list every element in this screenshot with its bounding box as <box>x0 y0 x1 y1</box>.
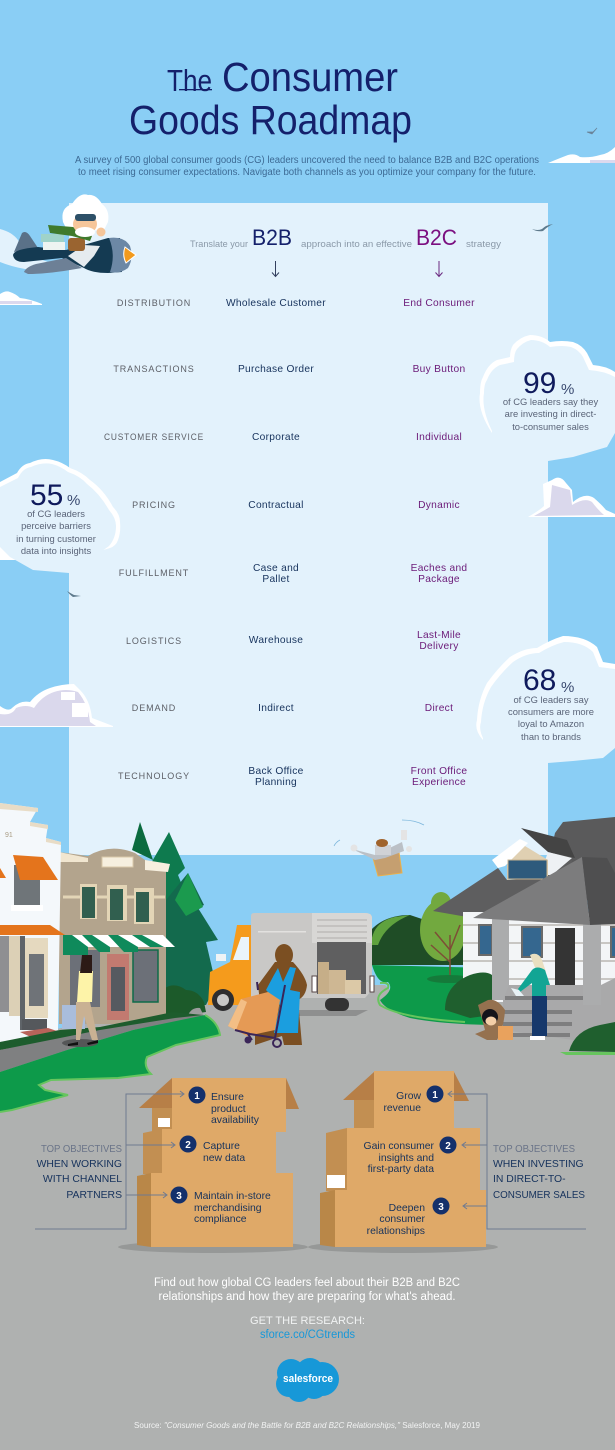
right objectives heading: TOP OBJECTIVES <box>493 1144 575 1155</box>
row: distribution <box>117 298 475 309</box>
objective 3: Deepen <box>389 1203 425 1214</box>
cloud callout: 68 percent: consumers are more <box>508 706 594 717</box>
row: technology: Front Office <box>411 766 467 777</box>
cloud with cup <box>528 478 615 517</box>
row: demand: Indirect <box>258 703 294 714</box>
dormer wall <box>540 852 572 875</box>
row: transactions: TRANSACTIONS <box>113 364 195 374</box>
row: distribution: DISTRIBUTION <box>117 298 191 308</box>
row: pricing <box>132 500 460 511</box>
house <box>433 817 615 1055</box>
door <box>107 954 129 1020</box>
bear body <box>255 962 307 1045</box>
hand truck frame <box>235 982 285 1040</box>
shopper with bag <box>62 955 98 1047</box>
delivery drone <box>334 820 424 876</box>
right tree <box>420 892 471 983</box>
hills <box>371 915 463 965</box>
hair <box>62 194 108 232</box>
objective 1: availability <box>211 1115 260 1126</box>
cloud callout: 68 percent: of CG leaders say <box>513 694 589 705</box>
title: Consumer <box>222 54 398 100</box>
cloud callout: 55 percent <box>0 459 120 573</box>
cargo opening <box>317 942 366 994</box>
arrow: B2C <box>436 261 442 276</box>
orange awnings <box>13 855 58 880</box>
goggles <box>75 214 96 221</box>
packages <box>41 234 64 242</box>
propeller cone <box>124 247 136 263</box>
row: fulfillment: Package <box>418 574 460 585</box>
door <box>555 928 575 986</box>
plane wing <box>24 258 82 274</box>
table header: B2C <box>416 225 457 250</box>
objective 3: 3 <box>176 1191 182 1202</box>
intro text: to meet rising consumer expectations. Navigate both channels as you optimize your company for the future. <box>78 167 536 178</box>
row: distribution: End Consumer <box>403 298 475 309</box>
row: transactions <box>113 364 465 375</box>
row: pricing: Contractual <box>248 500 304 511</box>
row: technology <box>118 766 467 788</box>
call to action text: Find out how global CG leaders feel about their B2B and B2C <box>154 1277 460 1289</box>
cloud callout: 55 percent: data into insights <box>21 545 91 556</box>
title <box>129 54 412 143</box>
front roof <box>473 857 590 925</box>
objective 2: Gain consumer <box>364 1141 435 1152</box>
bottom box <box>320 1190 486 1247</box>
trees <box>132 822 218 1005</box>
row: logistics: LOGISTICS <box>126 636 182 646</box>
propeller ring <box>109 238 132 272</box>
title: The <box>167 63 212 98</box>
right objectives heading: IN DIRECT-TO- <box>493 1174 566 1185</box>
cloud: lower left with truck <box>0 684 113 727</box>
table header: strategy <box>466 239 501 250</box>
objective 3: Maintain in-store <box>194 1191 271 1202</box>
wheels <box>212 989 234 1011</box>
cloud callout: 99 percent: % <box>561 381 574 398</box>
middle box <box>326 1128 480 1191</box>
beige shop <box>59 849 175 1024</box>
salesforce logo <box>276 1358 339 1402</box>
cloud callout: 99 percent: of CG leaders say they <box>503 396 598 407</box>
left objectives heading: WITH CHANNEL <box>43 1174 122 1185</box>
tail lights <box>312 976 317 992</box>
cloud callout: 55 percent: 55 <box>30 479 63 512</box>
cloud callout: 99 percent: to-consumer sales <box>512 421 589 432</box>
row: demand: Direct <box>425 703 453 714</box>
cloud callout: 99 percent <box>480 335 615 461</box>
row: fulfillment <box>119 563 467 585</box>
objective 3: merchandising <box>194 1203 262 1214</box>
objective 2: 2 <box>445 1141 451 1152</box>
back roof <box>433 860 575 918</box>
cloud callout: 68 percent <box>476 636 615 763</box>
objective 2 <box>180 1136 245 1164</box>
row: customer service <box>104 432 462 443</box>
cloud callout: 99 percent: 99 <box>523 367 556 400</box>
truck box <box>251 913 372 998</box>
left connector arrows <box>35 1091 184 1229</box>
shop windows <box>80 884 97 919</box>
right lawn <box>372 965 490 1025</box>
porch base <box>503 978 615 1040</box>
cloud: top right <box>548 147 615 163</box>
right objectives heading: WHEN INVESTING <box>493 1159 584 1170</box>
cloud callout: 55 percent: perceive barriers <box>21 520 91 531</box>
row: customer service: Corporate <box>252 432 300 443</box>
title: Goods Roadmap <box>129 97 412 143</box>
row: demand <box>132 703 453 714</box>
row: technology: Experience <box>412 777 466 788</box>
street scene <box>0 803 615 1450</box>
call to action text <box>154 1277 460 1303</box>
left lawn <box>0 1015 220 1112</box>
left objectives heading: WHEN WORKING <box>37 1159 122 1170</box>
box shadow <box>118 1241 308 1253</box>
objective 1 <box>188 1086 260 1126</box>
arrow: B2B <box>272 261 279 276</box>
objective 1: Grow <box>396 1091 421 1102</box>
objective 3 <box>367 1198 450 1237</box>
objective 3: consumer <box>379 1214 426 1225</box>
table header: B2B <box>252 225 292 250</box>
sidewalk <box>0 1015 203 1072</box>
bird: top right <box>587 128 597 134</box>
row: demand: DEMAND <box>132 703 176 713</box>
objective 1: revenue <box>383 1103 421 1114</box>
central light panel <box>69 203 548 855</box>
left objectives heading: TOP OBJECTIVES <box>41 1144 122 1155</box>
cloud callout: 68 percent: % <box>561 679 574 696</box>
objective 1 <box>383 1086 444 1114</box>
row: pricing: Dynamic <box>418 500 460 511</box>
cloud callout: 99 percent: are investing in direct- <box>505 408 596 419</box>
intro text: A survey of 500 global consumer goods (CG) leaders uncovered the need to balance B2B and B2C operations <box>75 155 539 166</box>
shop bush <box>165 985 206 1015</box>
boxes on hand truck <box>228 992 280 1036</box>
cloud callout: 55 percent: % <box>67 492 80 509</box>
ground <box>0 985 615 1450</box>
get the research heading: GET THE RESEARCH: <box>250 1315 365 1327</box>
striped awning <box>63 935 175 955</box>
objective 2: first-party data <box>368 1164 434 1175</box>
house walls <box>463 912 615 1002</box>
bird: panel right <box>532 224 553 231</box>
objective 3: relationships <box>367 1226 425 1237</box>
body <box>68 238 85 251</box>
bird: left <box>67 591 81 597</box>
porch columns <box>492 918 509 1000</box>
arm <box>96 228 106 236</box>
cloud callout: 68 percent: loyal to Amazon <box>518 718 584 729</box>
right objectives heading: CONSUMER SALES <box>493 1190 585 1201</box>
row: technology: TECHNOLOGY <box>118 771 190 781</box>
upper roof <box>540 817 615 900</box>
white building: 91 <box>5 832 13 839</box>
dark lawn strip <box>0 1012 203 1050</box>
row: customer service: Individual <box>416 432 462 443</box>
delivery truck <box>208 913 374 1016</box>
row: fulfillment: Pallet <box>262 574 290 585</box>
windows <box>479 925 492 955</box>
apron <box>266 967 300 1033</box>
middle box <box>143 1129 276 1174</box>
source note: Source: "Consumer Goods and the Battle for B2B and B2C Relationships," Salesforce, May 2019 <box>134 1421 481 1430</box>
table header: approach into an effective <box>301 239 412 250</box>
truck shadow <box>265 1010 368 1016</box>
top box <box>343 1071 469 1130</box>
row: logistics: Last-Mile <box>417 630 461 641</box>
table header <box>190 225 501 276</box>
comparison table <box>104 298 475 788</box>
row: technology: Back Office <box>248 766 304 777</box>
cloud callout: 68 percent: than to brands <box>521 731 581 742</box>
call to action text: relationships and how they are preparing for what's ahead. <box>158 1291 456 1303</box>
top box <box>139 1078 299 1132</box>
cab <box>208 925 251 1005</box>
row: distribution: Wholesale Customer <box>226 298 326 309</box>
row: logistics: Delivery <box>419 641 459 652</box>
right bush <box>569 1022 615 1052</box>
table header: Translate your <box>190 239 248 250</box>
white building <box>0 803 65 1042</box>
objective 2: 2 <box>185 1140 191 1151</box>
cloud callout: 55 percent: in turning customer <box>16 533 96 544</box>
row: fulfillment: FULFILLMENT <box>119 568 189 578</box>
right box stack <box>308 1071 498 1253</box>
row: pricing: PRICING <box>132 500 176 510</box>
row: fulfillment: Case and <box>253 563 299 574</box>
bear with hand truck <box>228 944 307 1047</box>
objective 1: product <box>211 1104 246 1115</box>
objective 3: 3 <box>438 1202 444 1213</box>
porch bush <box>445 972 492 1018</box>
left objectives heading <box>37 1144 122 1201</box>
plane tail <box>14 232 38 252</box>
cloud: behind plane <box>0 229 69 271</box>
steps <box>503 998 583 1035</box>
mascot in airplane <box>13 194 136 274</box>
plane body <box>13 238 122 273</box>
objective 2 <box>364 1136 456 1175</box>
bottom box <box>137 1173 293 1247</box>
objective 1: Ensure <box>211 1092 244 1103</box>
beard <box>75 227 95 237</box>
child in bear costume <box>475 1000 513 1040</box>
objective 2: Capture <box>203 1141 240 1152</box>
dormer roof peak <box>521 828 575 858</box>
cloud: small left <box>0 291 42 305</box>
row: transactions: Buy Button <box>413 364 465 375</box>
rock <box>188 1008 204 1016</box>
salesforce logo: salesforce <box>283 1373 333 1385</box>
woman with tablet <box>511 954 550 1040</box>
row: logistics: Warehouse <box>249 635 303 646</box>
objective 3: compliance <box>194 1214 247 1225</box>
bear head <box>275 944 293 966</box>
objective 2: new data <box>203 1153 245 1164</box>
objective 1: 1 <box>432 1090 438 1101</box>
row: fulfillment: Eaches and <box>411 563 467 574</box>
row: logistics <box>126 630 461 652</box>
row: transactions: Purchase Order <box>238 364 314 375</box>
research link: sforce.co/CGtrends <box>260 1329 355 1341</box>
objective 3 <box>170 1186 271 1225</box>
box shadow <box>308 1241 498 1253</box>
objective 1: 1 <box>194 1091 200 1102</box>
left objectives heading: PARTNERS <box>66 1190 122 1201</box>
right connector arrows <box>448 1091 586 1229</box>
scarf <box>48 225 92 241</box>
face <box>73 214 97 234</box>
cloud callout: 55 percent: of CG leaders <box>27 508 85 519</box>
cloud callout: 68 percent: 68 <box>523 664 556 697</box>
doormat <box>20 1028 63 1039</box>
left box stack <box>118 1078 308 1253</box>
right objectives heading <box>493 1144 585 1201</box>
intro text <box>75 155 539 178</box>
dormer <box>507 843 548 880</box>
row: customer service: CUSTOMER SERVICE <box>104 432 204 442</box>
row: technology: Planning <box>255 777 297 788</box>
objective 2: insights and <box>379 1153 434 1164</box>
storefront <box>70 950 100 1007</box>
